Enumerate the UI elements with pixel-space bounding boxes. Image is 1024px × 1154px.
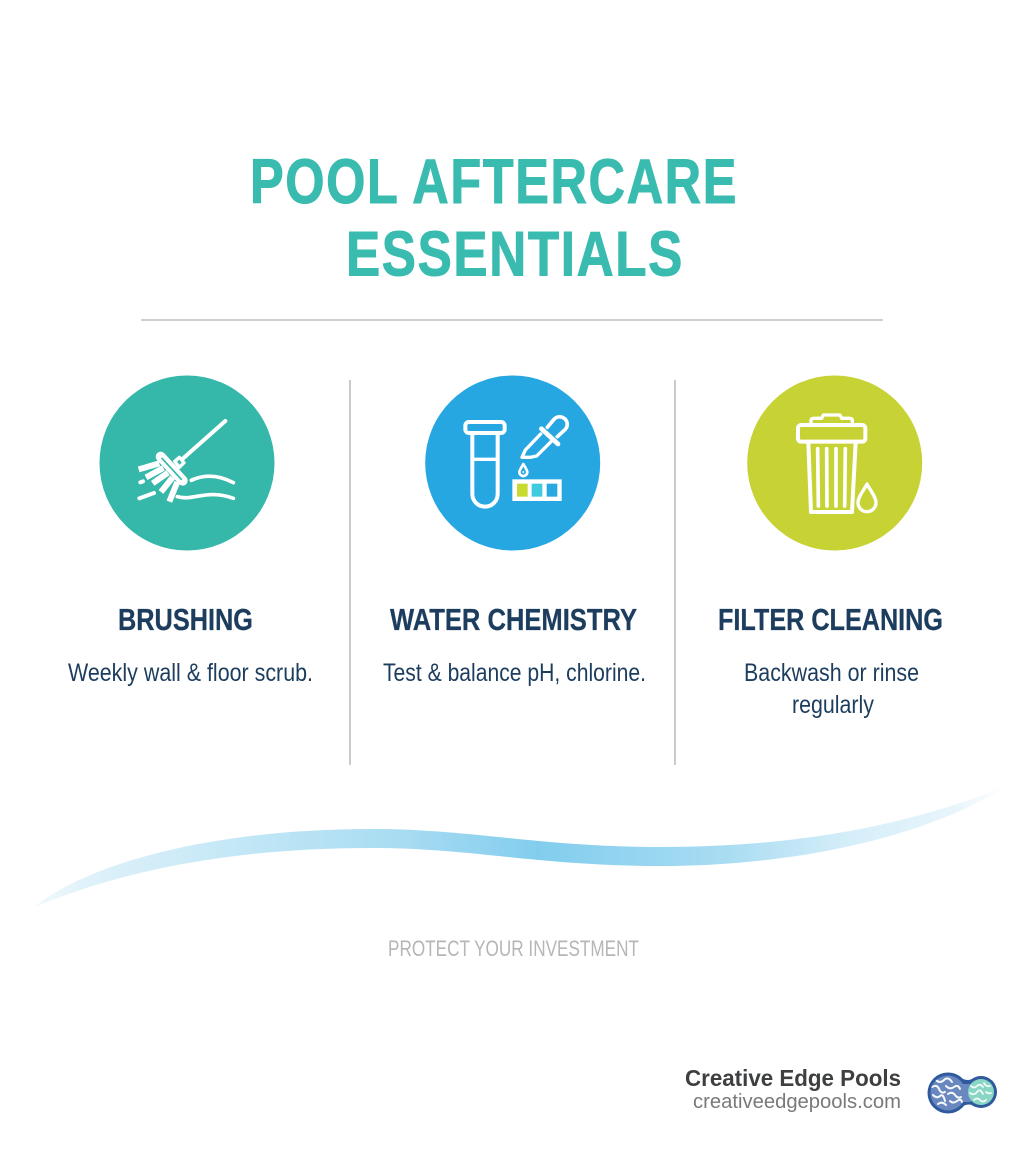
text: water chemistry description: Test & balance pH, chlorine. (383, 659, 646, 687)
text: filter cleaning description: regularly (792, 691, 874, 719)
heading: filter cleaning: FILTER CLEANING (718, 602, 943, 637)
decorative wave (33, 787, 1005, 908)
tagline: PROTECT YOUR INVESTMENT (388, 936, 639, 961)
title (250, 147, 738, 290)
title: ESSENTIALS (346, 220, 684, 290)
icon: filter canister and droplet (747, 376, 922, 550)
brand name and url: creativeedgepools.com (693, 1090, 901, 1113)
heading: water chemistry: WATER CHEMISTRY (390, 602, 637, 637)
title: POOL AFTERCARE (250, 147, 738, 217)
brand name and url: Creative Edge Pools (685, 1065, 901, 1091)
text: filter cleaning description: Backwash or rinse (744, 659, 919, 687)
heading: brushing: BRUSHING (118, 602, 253, 637)
panel: brushing (68, 376, 313, 687)
text: filter cleaning description (744, 659, 919, 719)
brand name and url (685, 1065, 901, 1113)
text: brushing description: Weekly wall & floor scrub. (68, 659, 313, 687)
icon: pool brush (100, 376, 274, 550)
panel: water chemistry (383, 376, 646, 687)
icon: test tube, dropper and strip (425, 376, 600, 550)
panel: filter cleaning (718, 376, 943, 719)
logo (928, 1072, 997, 1114)
